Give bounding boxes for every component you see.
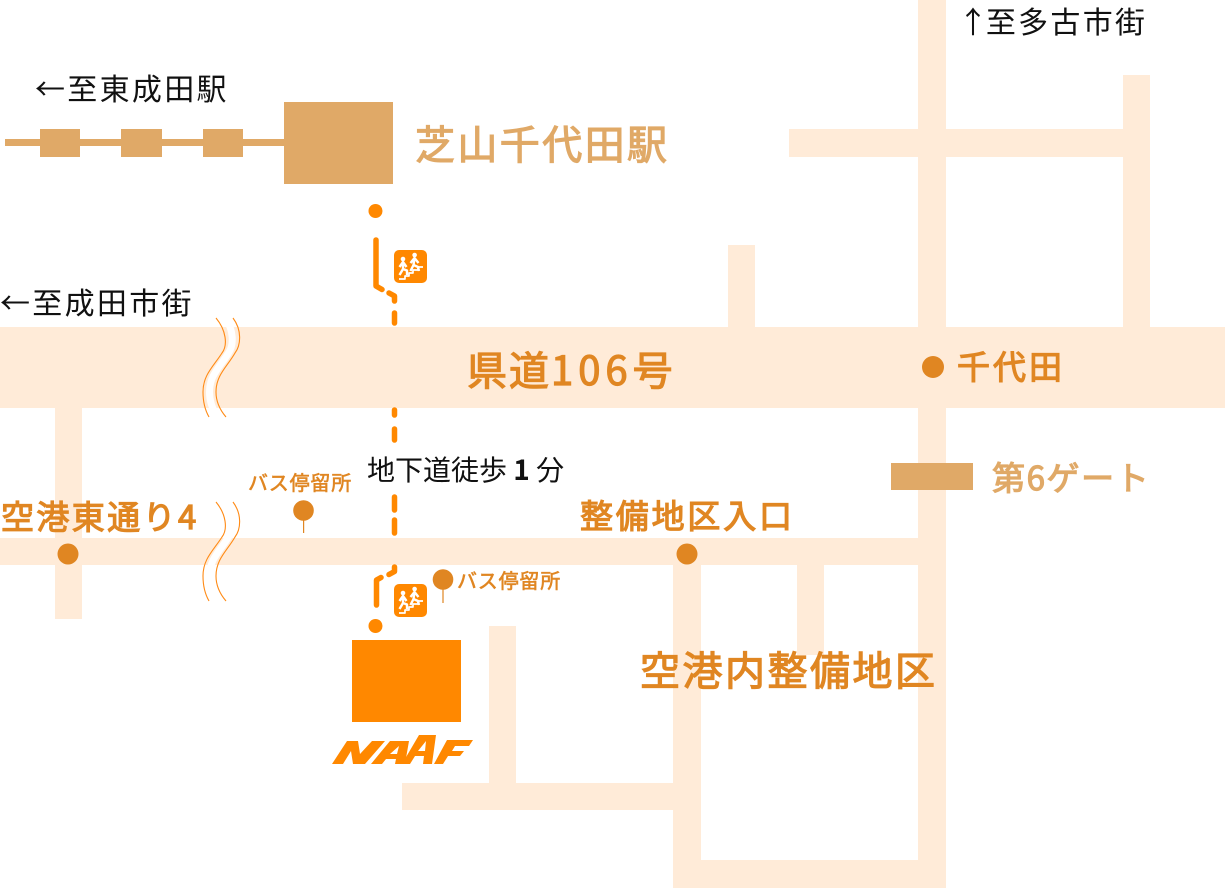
NAAF building [352,640,461,722]
gate 6 [891,452,1150,500]
NAAF logo [332,735,473,764]
walking route [368,204,394,633]
bus stop: north side [248,467,352,533]
bus stop: south side: バス停留所 [457,565,561,594]
marker: maintenance area entrance: 整備地区入口 [580,490,795,538]
bus stop: south side [433,565,561,603]
area label: airport maintenance district: 空港内整備地区 [640,639,938,697]
marker: maintenance area entrance [580,490,795,564]
direction label: to Narita city: ←至成田市街 [0,279,194,323]
walking time label: 地下道徒歩 1 分 [367,449,564,489]
road break: prefectural road 106 [203,318,240,417]
marker: Airport East Street 4: 空港東通り4 [1,491,199,539]
road label: prefectural road 106: 県道106号 [467,339,675,397]
marker: Chiyoda: 千代田 [957,341,1065,389]
icon: underpass stairs, upper [394,250,427,283]
icon: underpass stairs, lower [394,584,427,617]
gate 6: 第6ゲート [992,452,1150,500]
bus stop: north side: バス停留所 [248,467,352,496]
road break: airport east street [203,502,240,601]
marker: Airport East Street 4 [1,491,199,564]
station name: 芝山千代田駅 [415,113,669,171]
direction label: to Higashi-Narita station: ←至東成田駅 [35,65,229,109]
station: Shibayama-Chiyoda [5,102,393,184]
